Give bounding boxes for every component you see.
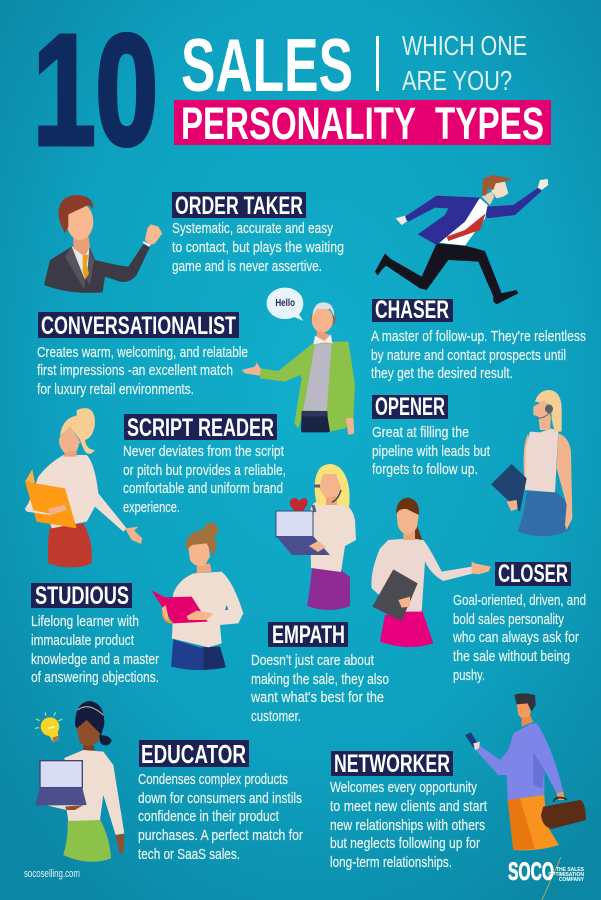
description: pushy. <box>453 667 485 684</box>
heading <box>495 560 571 588</box>
illustration: woman with orange book <box>24 408 142 567</box>
illustration: man with speech bubble <box>242 288 355 435</box>
description: comfortable and uniform brand <box>123 480 283 497</box>
logo: soco: COMPANY <box>559 877 585 883</box>
description: of answering objections. <box>31 669 159 686</box>
description: to contact, but plays the waiting <box>172 239 344 256</box>
description: the sale without being <box>453 648 570 665</box>
heading: CONVERSATIONALIST <box>41 312 236 340</box>
description <box>371 328 586 382</box>
description: they get the desired result. <box>371 365 513 382</box>
description: knowledge and a master <box>31 651 159 668</box>
title banner: TYPES <box>435 98 544 149</box>
speech bubble <box>267 288 303 321</box>
tagline <box>402 30 527 96</box>
description: forgets to follow up. <box>372 461 478 478</box>
panel: studious <box>31 523 243 686</box>
description <box>31 613 159 686</box>
illustration: order taker man <box>44 195 162 293</box>
title banner: PERSONALITY <box>181 98 416 149</box>
description: first impressions -an excellent match <box>37 362 233 379</box>
description <box>330 779 488 871</box>
panel: conversationalist <box>37 288 355 435</box>
description: making the sale, they also <box>251 671 389 688</box>
description: pipeline with leads but <box>372 443 491 460</box>
title number 10: 10 <box>33 3 158 178</box>
panel: chaser <box>371 175 586 382</box>
illustration: running man <box>375 175 548 304</box>
logo: soco: OPTIMISATION <box>548 872 584 878</box>
heading: EMPATH <box>272 621 345 649</box>
heading <box>372 393 448 421</box>
description: to meet new clients and start <box>330 798 488 815</box>
heading: SCRIPT READER <box>127 414 274 442</box>
illustration: woman with headset and binder <box>491 390 572 536</box>
description: or pitch but provides a reliable, <box>123 462 286 479</box>
description: Creates warm, welcoming, and relatable <box>37 344 248 361</box>
heading: CLOSER <box>498 560 568 588</box>
description: immaculate product <box>31 632 135 649</box>
description: confidence in their product <box>138 808 280 825</box>
panel: order taker <box>44 192 344 293</box>
description: Systematic, accurate and easy <box>172 220 333 237</box>
description <box>250 652 389 725</box>
title separator <box>376 36 379 91</box>
illustration: woman with tablet <box>371 498 491 647</box>
description: Doesn't just care about <box>251 652 375 669</box>
description: Welcomes every opportunity <box>330 779 477 796</box>
heading: CHASER <box>375 296 449 324</box>
panel: networker <box>330 693 586 871</box>
heading: STUDIOUS <box>35 582 129 610</box>
panel: educator <box>35 701 303 863</box>
description: Lifelong learner with <box>31 613 139 630</box>
title <box>33 3 551 178</box>
description <box>172 220 344 275</box>
illustration: woman with headset, laptop and heart <box>276 464 356 610</box>
description: Condenses complex products <box>138 771 288 788</box>
description: tech or SaaS sales. <box>138 846 240 863</box>
description: want what's best for the <box>250 689 384 706</box>
panel: opener <box>372 390 572 536</box>
heading: ORDER TAKER <box>175 192 303 220</box>
description: game and is never assertive. <box>172 258 322 275</box>
illustration: woman with laptop and light bulb <box>35 701 124 862</box>
tagline: ARE YOU? <box>402 65 512 96</box>
description: for luxury retail environments. <box>37 381 194 398</box>
description <box>452 592 586 684</box>
description: purchases. A perfect match for <box>138 827 303 844</box>
description: experience. <box>123 499 180 516</box>
panel: empath <box>250 464 389 725</box>
description: customer. <box>251 708 301 725</box>
description <box>138 771 303 863</box>
illustration: woman reading pink book <box>151 523 243 670</box>
description: bold sales personality <box>453 611 564 628</box>
logo: soco: SOCO <box>508 858 554 886</box>
title word sales: SALES <box>181 23 353 107</box>
description: down for consumers and instils <box>138 790 302 807</box>
description <box>37 344 248 398</box>
panel: script reader <box>24 408 286 567</box>
website url: socoselling.com <box>24 868 80 880</box>
description: new relationships with others <box>330 817 485 834</box>
logo: soco: THE SALES <box>556 867 585 873</box>
description: long-term relationships. <box>330 854 452 871</box>
description: Never deviates from the script <box>123 443 285 460</box>
tagline: WHICH ONE <box>402 30 527 61</box>
heading: NETWORKER <box>334 750 450 778</box>
description <box>123 443 286 516</box>
description: Great at filling the <box>372 424 469 441</box>
icon: light bulb <box>35 712 62 742</box>
speech bubble: Hello <box>275 298 295 309</box>
panel: closer <box>371 498 586 684</box>
illustration: man with phone and briefcase <box>465 693 586 850</box>
logo: soco <box>508 857 585 900</box>
description <box>372 424 491 478</box>
heading: EDUCATOR <box>141 739 246 769</box>
heading: OPENER <box>375 393 445 421</box>
description: but neglects following up for <box>330 835 480 852</box>
